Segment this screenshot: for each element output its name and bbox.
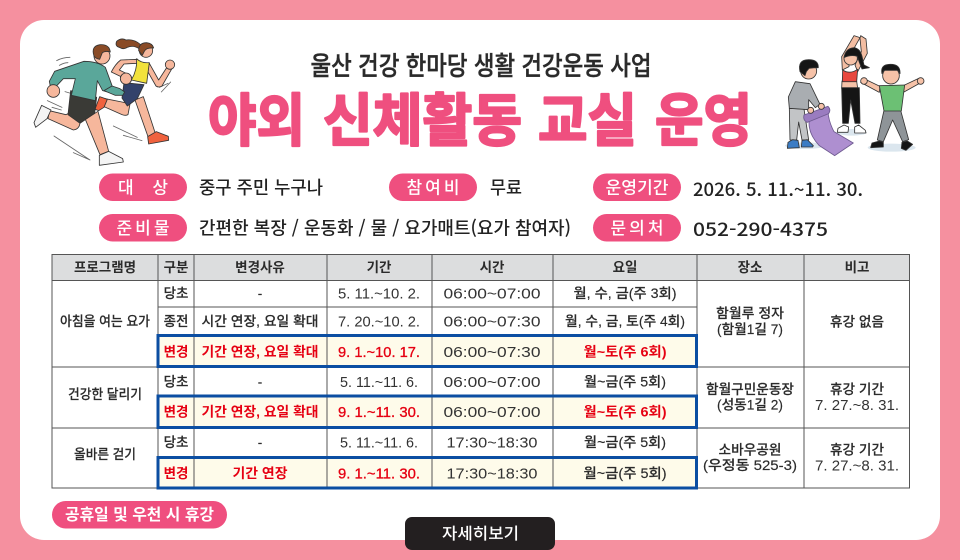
info row: supplies: 간편한 복장 / 운동화 / 물 / 요가매트(요가 참여자) xyxy=(199,214,571,240)
program: correct walking: - xyxy=(258,435,262,450)
info row: contact: 052-290-4375 xyxy=(693,216,828,242)
program: healthy running: 06:00~07:00 xyxy=(444,374,540,391)
program: correct walking: 당초 xyxy=(164,435,188,450)
program: healthy running: 건강한 달리기 xyxy=(68,387,142,402)
program: healthy running: 휴강 기간 xyxy=(830,382,884,397)
subtitle: 울산 건강 한마당 생활 건강운동 사업 xyxy=(310,46,652,83)
program: healthy running: 5. 11.~11. 6. xyxy=(340,374,418,391)
program: correct walking: 기간 연장 xyxy=(232,466,288,481)
program: morning yoga: 5. 11.~10. 2. xyxy=(338,286,420,302)
program: morning yoga: 월, 수, 금, 토(주 4회) xyxy=(565,313,685,329)
program: morning yoga: 휴강 없음 xyxy=(830,314,884,330)
button: view details xyxy=(405,517,555,550)
main title: 교실 xyxy=(538,76,637,158)
main title xyxy=(208,76,752,158)
program: morning yoga: 시간 연장, 요일 확대 xyxy=(202,314,318,329)
note pill: closed on holidays and rain: 공휴일 및 우천 시 휴강 xyxy=(65,501,214,525)
info row: fee xyxy=(389,174,522,201)
table header: 구분 xyxy=(164,260,188,275)
program: morning yoga: 06:00~07:30 xyxy=(444,344,540,361)
program: correct walking: 소바우공원 xyxy=(718,442,782,458)
program: morning yoga: 종전 xyxy=(164,314,188,329)
program: morning yoga: 월~토(주 6회) xyxy=(584,344,666,360)
table header: 장소 xyxy=(738,260,762,275)
table header: 요일 xyxy=(613,260,637,275)
program: morning yoga: 함월루 정자 xyxy=(716,305,785,321)
info row: contact: 문의처 xyxy=(610,214,664,239)
program: morning yoga: 06:00~07:00 xyxy=(444,286,540,302)
table header: 프로그램명 xyxy=(74,260,136,275)
program: correct walking: 월~금(주 5회) xyxy=(584,434,666,450)
main title: 야외 xyxy=(208,76,305,158)
program: morning yoga: 당초 xyxy=(164,286,188,301)
table header xyxy=(74,260,869,275)
program: correct walking: 9. 1.~11. 30. xyxy=(338,466,420,482)
icon: two runners illustration xyxy=(34,39,175,165)
changed rows highlight outlines xyxy=(158,336,696,488)
program: morning yoga xyxy=(60,285,884,361)
program: healthy running: 함월구민운동장 xyxy=(706,381,794,397)
program: correct walking: 5. 11.~11. 6. xyxy=(340,434,418,452)
program: correct walking: 월~금(주 5회) xyxy=(584,465,666,481)
program: healthy running: 당초 xyxy=(164,374,188,390)
program: morning yoga: 변경 xyxy=(164,344,188,360)
program: morning yoga: 7. 20.~10. 2. xyxy=(338,314,420,330)
program: healthy running: 기간 연장, 요일 확대 xyxy=(202,404,318,420)
program: correct walking xyxy=(74,434,899,482)
button: view details: 자세히보기 xyxy=(442,520,519,544)
program: healthy running: - xyxy=(258,374,262,390)
program: healthy running: 변경 xyxy=(164,404,188,420)
info row: target: 대상 xyxy=(118,174,168,198)
program: correct walking: 변경 xyxy=(164,466,188,481)
info row: fee: 참여비 xyxy=(406,174,460,198)
program: correct walking: 올바른 걷기 xyxy=(74,447,136,462)
program: morning yoga: 아침을 여는 요가 xyxy=(60,314,151,329)
program: healthy running: (성동1길 2) xyxy=(717,398,783,412)
program: healthy running: 06:00~07:00 xyxy=(444,404,540,421)
program: healthy running: 월~금(주 5회) xyxy=(584,374,666,390)
table header: 비고 xyxy=(845,260,869,275)
program: healthy running: 9. 1.~11. 30. xyxy=(338,404,420,421)
program: morning yoga: (함월1길 7) xyxy=(717,321,783,337)
main title: 신체활동 xyxy=(323,76,522,158)
program: morning yoga: 기간 연장, 요일 확대 xyxy=(202,344,318,360)
info row: period xyxy=(593,174,863,202)
info row: period: 운영기간 xyxy=(606,174,669,198)
table header: 변경사유 xyxy=(235,260,285,275)
program: healthy running: 7. 27.~8. 31. xyxy=(815,397,899,414)
icon: group exercise illustration with yoga mat xyxy=(785,36,924,156)
program: morning yoga: 06:00~07:30 xyxy=(444,314,540,330)
program: correct walking: 17:30~18:30 xyxy=(446,466,538,482)
program: healthy running xyxy=(68,374,899,421)
program: morning yoga: 9. 1.~10. 17. xyxy=(338,344,420,361)
table header: 기간 xyxy=(367,260,392,275)
program: morning yoga: - xyxy=(258,286,262,301)
table header: 시간 xyxy=(480,260,505,275)
main title: 운영 xyxy=(655,76,752,158)
program: correct walking: (우정동 525-3) xyxy=(703,458,797,473)
program: correct walking: 17:30~18:30 xyxy=(446,434,538,452)
info row: period: 2026. 5. 11.~11. 30. xyxy=(693,176,863,202)
schedule table xyxy=(52,254,910,488)
program: morning yoga: 월, 수, 금(주 3회) xyxy=(574,285,676,301)
program: healthy running: 월~토(주 6회) xyxy=(584,404,666,420)
info row: supplies: 준비물 xyxy=(116,214,170,239)
info row: target xyxy=(99,174,323,201)
program: correct walking: 휴강 기간 xyxy=(830,442,884,458)
info row: target: 중구 주민 누구나 xyxy=(199,174,323,200)
info row: contact xyxy=(593,214,828,242)
info row: fee: 무료 xyxy=(490,174,522,200)
program: correct walking: 7. 27.~8. 31. xyxy=(815,458,899,474)
